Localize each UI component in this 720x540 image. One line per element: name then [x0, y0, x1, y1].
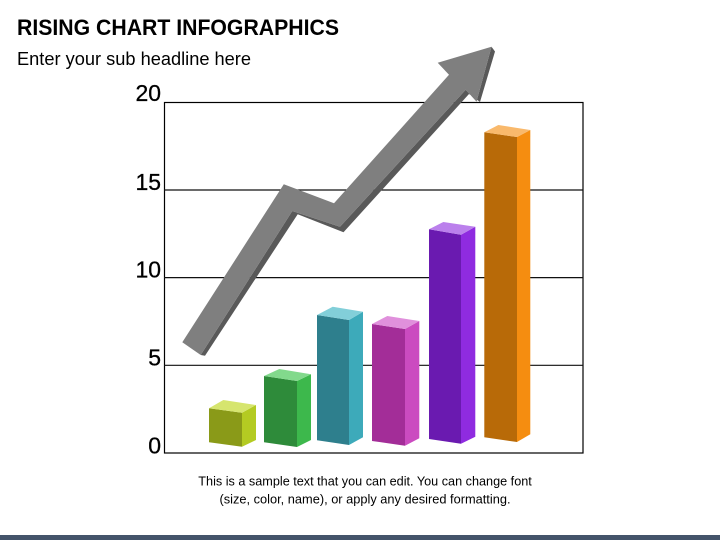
footer bar [0, 535, 720, 540]
bar 1 [209, 400, 256, 447]
rising arrow [182, 47, 495, 356]
chart grid [164, 102, 583, 453]
y axis labels [136, 80, 161, 458]
y axis labels: 5 [148, 344, 161, 370]
y axis labels: 10 [136, 256, 161, 282]
y axis labels: 0 [148, 432, 161, 458]
caption: This is a sample text that you can edit. You can change font [198, 474, 532, 488]
subtitle: Enter your sub headline here [17, 49, 251, 69]
bar 6 [484, 125, 530, 442]
bar 5 [429, 222, 475, 444]
y axis labels: 15 [136, 169, 161, 195]
bar 4 [372, 316, 419, 446]
title: RISING CHART INFOGRAPHICS [17, 15, 339, 40]
caption [198, 474, 532, 506]
bar 3 [317, 307, 363, 445]
caption: (size, color, name), or apply any desired formatting. [220, 492, 510, 506]
y axis labels: 20 [136, 80, 161, 106]
bar 2 [264, 369, 311, 447]
